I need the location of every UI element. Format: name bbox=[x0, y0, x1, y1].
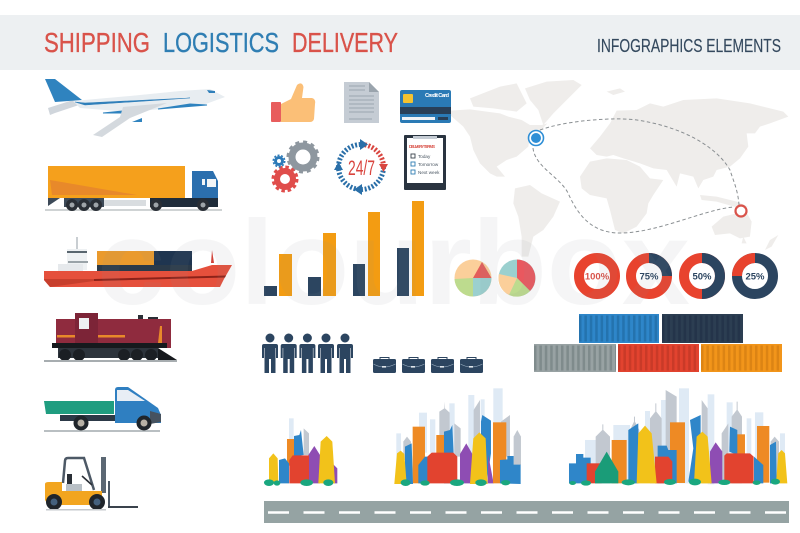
icon: forklift bbox=[45, 457, 138, 510]
medium city skyline bbox=[394, 388, 521, 486]
title: shipping: SHIPPING bbox=[44, 27, 150, 58]
map marker: destination bbox=[736, 206, 746, 216]
donut: 75%: 75% bbox=[639, 272, 659, 282]
donut: 25% bbox=[737, 258, 773, 294]
icon: document bbox=[344, 82, 379, 123]
large city skyline bbox=[569, 388, 787, 486]
pie chart 1 bbox=[454, 260, 492, 297]
icon: clipboard: Tomorrow bbox=[418, 162, 439, 167]
shipping containers bbox=[534, 314, 782, 372]
icon: clipboard: Next week bbox=[418, 170, 440, 175]
donut: 50% bbox=[684, 258, 720, 294]
icon: 24/7 clock bbox=[334, 139, 388, 195]
donut: 50%: 50% bbox=[692, 272, 712, 282]
icon: truck bbox=[45, 166, 222, 211]
icon: clipboard: DELIVERY TERMS bbox=[409, 144, 435, 149]
title: delivery: DELIVERY bbox=[292, 27, 398, 58]
icon: credit card: Credit Card bbox=[425, 93, 450, 99]
small city skyline bbox=[264, 418, 337, 486]
briefcase icons bbox=[373, 358, 483, 373]
bar chart bbox=[264, 201, 424, 296]
route: northern path bbox=[540, 119, 739, 205]
icon: pickup truck bbox=[44, 387, 161, 432]
header band bbox=[0, 15, 800, 70]
donut: 25%: 25% bbox=[745, 272, 765, 282]
world map bbox=[450, 80, 788, 257]
pie chart 2 bbox=[498, 260, 536, 297]
icon: clipboard: Today bbox=[418, 154, 431, 159]
icon: locomotive bbox=[44, 313, 177, 362]
icon: 24/7 clock: 24/7 bbox=[348, 157, 375, 180]
donut: 100% bbox=[579, 258, 615, 294]
road bbox=[264, 501, 789, 523]
icon: clipboard bbox=[404, 135, 446, 190]
map marker: origin bbox=[528, 130, 544, 146]
icon: credit card bbox=[400, 90, 451, 123]
route: southern path bbox=[533, 148, 733, 233]
icon: airplane bbox=[45, 79, 225, 137]
donut: 100%: 100% bbox=[585, 272, 610, 282]
icon: container ship bbox=[44, 237, 232, 287]
icon: gears bbox=[273, 142, 318, 191]
title: logistics: LOGISTICS bbox=[163, 27, 279, 58]
watermark: colourbox bbox=[97, 196, 690, 330]
people icons bbox=[262, 334, 353, 373]
icon: thumbs up bbox=[271, 83, 315, 122]
donut: 75% bbox=[631, 258, 667, 294]
